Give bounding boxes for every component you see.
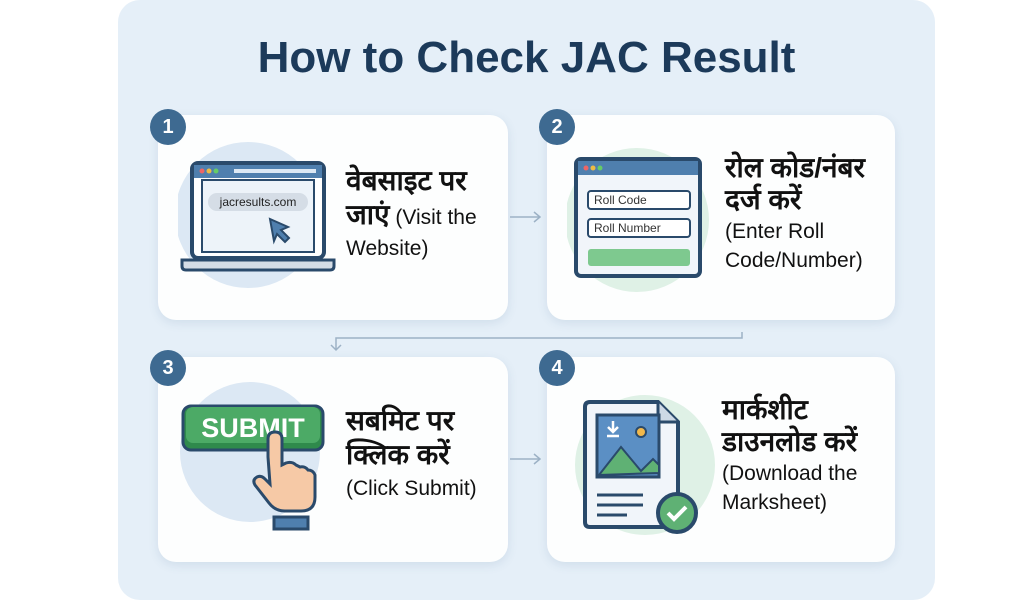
arrow: 1 to 2 [510, 212, 541, 222]
number 2: 2 [551, 116, 563, 138]
icon: laptop [178, 142, 336, 288]
arrow: 3 to 4 [510, 454, 541, 464]
title: How to Check JAC Result [258, 33, 795, 82]
text: step 1: वेबसाइट पर [346, 165, 467, 196]
text: step 4 [721, 393, 858, 514]
panel: step 3 [158, 357, 508, 562]
icon: laptop: jacresults.com [219, 195, 296, 209]
number 3: 3 [162, 357, 174, 379]
text: step 4: (Download the [722, 462, 857, 485]
text: step 1: जाएं (Visit the [346, 199, 477, 230]
icon: form [567, 148, 709, 292]
text: step 4: Marksheet) [722, 491, 827, 514]
text: step 4: मार्कशीट [722, 394, 808, 425]
number 1: 1 [162, 116, 174, 138]
icon: marksheet [575, 395, 715, 535]
panel: step 2 [547, 115, 895, 320]
text: step 3: क्लिक करें [346, 439, 450, 470]
number 4: 4 [551, 357, 563, 379]
number 4 [539, 350, 575, 386]
text: step 4: डाउनलोड करें [722, 426, 857, 457]
text: step 1: Website) [346, 237, 428, 260]
text: step 2 [724, 151, 866, 272]
text: step 3: (Click Submit) [346, 477, 477, 500]
arrow: 2 to 3 [330, 332, 743, 351]
text: step 2: (Enter Roll [725, 220, 824, 243]
panel: step 4 [547, 357, 895, 562]
panel: step 1 [158, 115, 508, 320]
text: step 2: Code/Number) [725, 249, 863, 272]
icon: submit button [180, 382, 324, 530]
number 1 [150, 109, 186, 145]
text: step 2: दर्ज करें [725, 184, 801, 215]
text: step 3: सबमिट पर [346, 405, 454, 436]
icon: submit button: SUBMIT [201, 413, 305, 443]
text: step 1 [346, 164, 477, 260]
icon: form: Roll Code [594, 193, 647, 207]
number 3 [150, 350, 186, 386]
icon: form: Roll Number [594, 221, 661, 235]
number 2 [539, 109, 575, 145]
text: step 3 [346, 404, 477, 500]
text: step 2: रोल कोड/नंबर [725, 152, 865, 183]
